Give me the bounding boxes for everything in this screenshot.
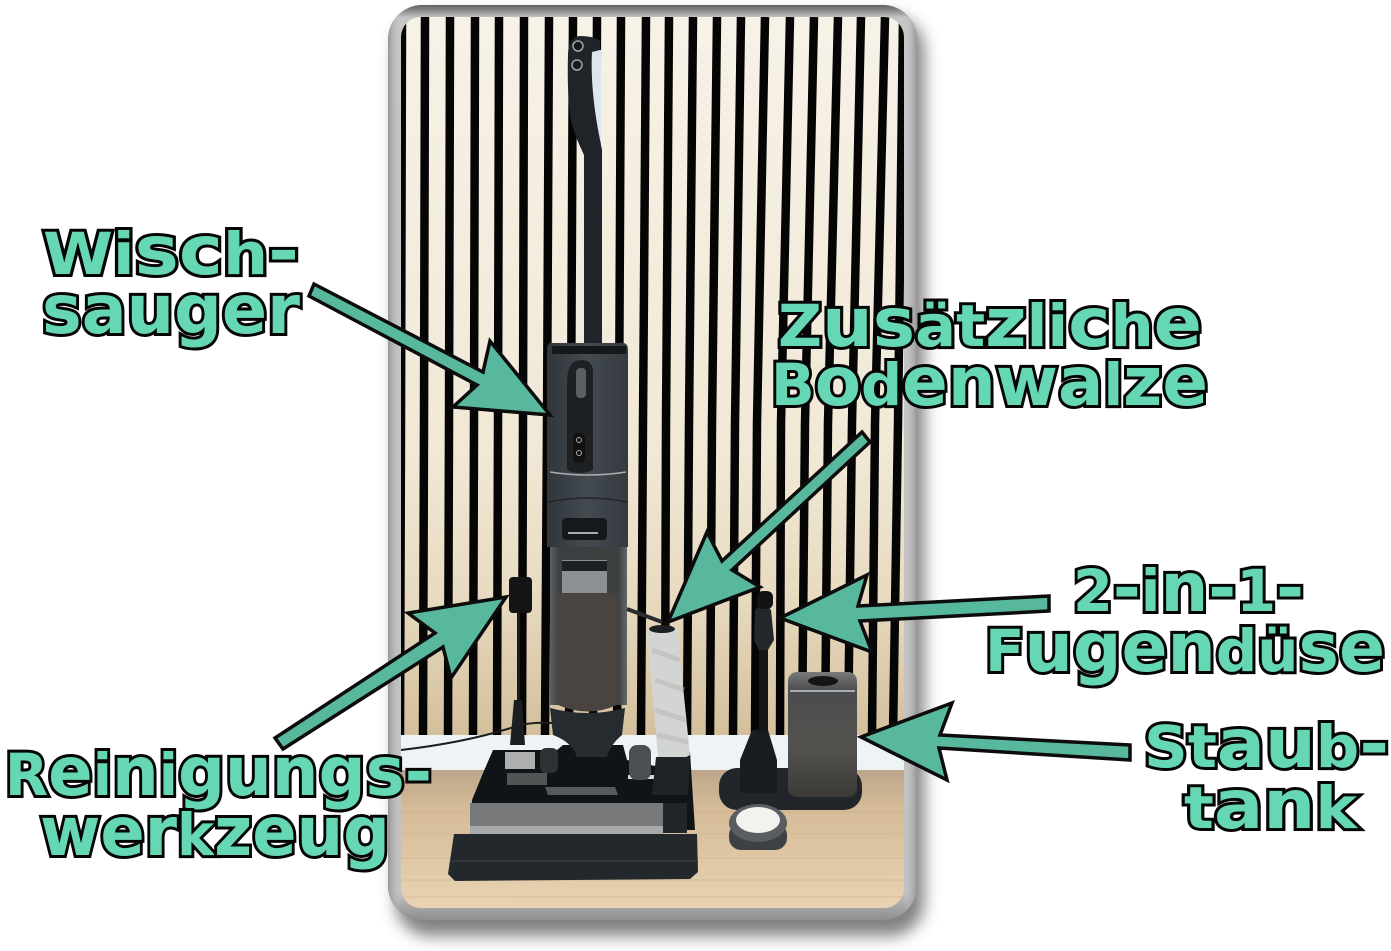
frame shadow: [396, 16, 924, 936]
label: Wischsauger: Wisch-: [43, 212, 299, 291]
dust tank: [788, 672, 857, 797]
floor head of vacuum: [448, 745, 698, 881]
stand base: [719, 768, 862, 810]
label: Reinigungswerkzeug: [5, 733, 432, 872]
power cable: [401, 723, 552, 750]
roller: [470, 803, 663, 826]
label: Staubtank: [1144, 705, 1389, 845]
arrow: Fugenduese: [780, 575, 1049, 652]
release slot: [562, 518, 607, 540]
label: 2-in-1-Fugenduese: [985, 549, 1385, 688]
arrow: Reinigungswerkzeug: [275, 597, 506, 749]
label: Staubtank: tank: [1184, 766, 1359, 845]
panel: framed photo: [388, 5, 924, 936]
photo frame: [388, 5, 917, 920]
upper housing: [547, 343, 628, 547]
vacuum handle and pole: [568, 36, 602, 345]
label: 2-in-1-Fugenduese: 2-in-1-: [1073, 549, 1304, 628]
housing grip: [567, 360, 593, 473]
label: Staubtank: Staub-: [1144, 705, 1389, 784]
nozzle head: [754, 605, 774, 650]
arrow: Staubtank: [861, 703, 1130, 780]
label: Wischsauger: sauger: [42, 271, 300, 350]
vacuum main body: [547, 343, 628, 757]
dirty water tank: [550, 547, 627, 705]
label: Zusaetzliche Bodenwalze: Zusätzliche: [778, 284, 1202, 363]
label: 2-in-1-Fugenduese: Fugendüse: [985, 609, 1385, 688]
front bumper: [448, 834, 698, 881]
tank foot: [550, 708, 625, 757]
label: Reinigungswerkzeug: werkzeug: [40, 793, 390, 872]
label: Reinigungswerkzeug: Reinigungs-: [5, 733, 432, 812]
arrow: Wischsauger: [309, 284, 550, 415]
cleaning brush tool: [509, 577, 532, 745]
filter: [729, 804, 787, 850]
label: Zusaetzliche Bodenwalze: [771, 284, 1208, 422]
label: Zusaetzliche Bodenwalze: Bodenwalze: [771, 343, 1208, 422]
label: Wischsauger: [42, 212, 300, 350]
wooden floor: [401, 770, 904, 908]
white baseboard: [401, 735, 904, 773]
arrow: Bodenwalze: [668, 432, 870, 622]
black slat gaps: [400, 17, 903, 735]
band: [550, 472, 626, 475]
spare floor roller: [627, 609, 690, 795]
crevice nozzle on stand: [719, 591, 862, 810]
dark top plate: [470, 745, 695, 830]
photo: [400, 17, 904, 908]
wooden slat wall: [401, 17, 904, 737]
